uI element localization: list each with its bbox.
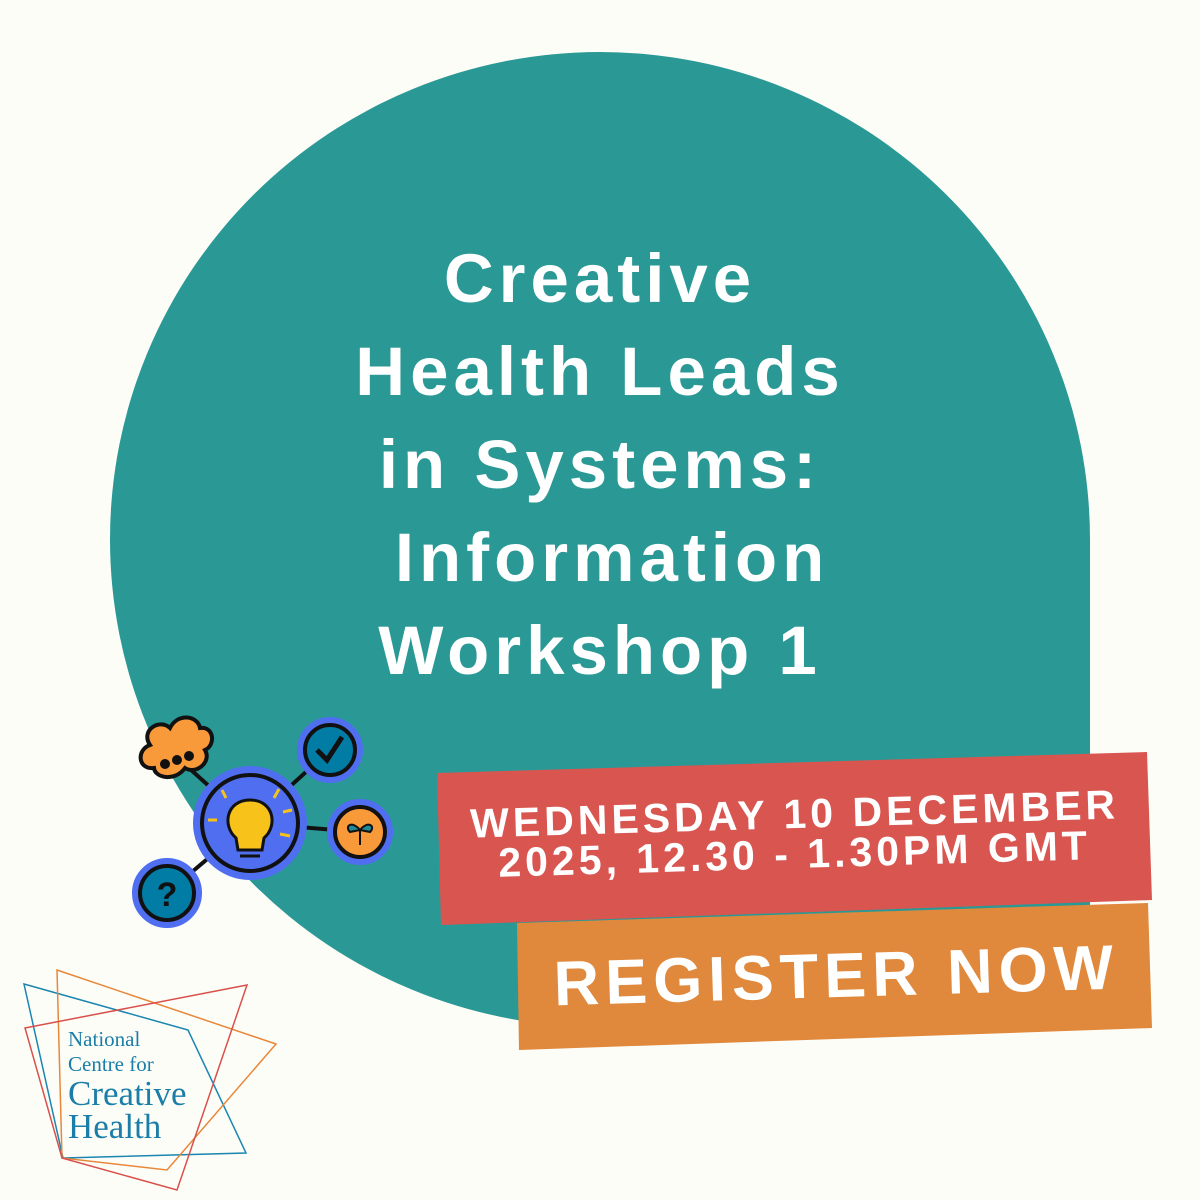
logo [24, 970, 276, 1190]
title: Information [395, 519, 829, 596]
banner: date: 2025, 12.30 - 1.30PM GMT [498, 822, 1092, 886]
logo: National [68, 1027, 140, 1051]
icon: idea network: ? [157, 876, 177, 914]
title: Health Leads [355, 333, 845, 410]
banner: date: WEDNESDAY 10 DECEMBER [470, 781, 1120, 847]
title: Workshop 1 [378, 612, 822, 689]
logo: Centre for [68, 1052, 154, 1076]
title: Creative [444, 240, 756, 317]
banner: date [437, 752, 1152, 925]
logo: Creative [68, 1074, 187, 1113]
logo: Health [68, 1107, 162, 1146]
icon: idea network [134, 717, 391, 926]
banner: register now [517, 903, 1152, 1050]
banner: register now: REGISTER NOW [553, 933, 1120, 1019]
title [355, 240, 845, 689]
title: in Systems: [379, 426, 821, 503]
teal blob background [110, 52, 1090, 1027]
